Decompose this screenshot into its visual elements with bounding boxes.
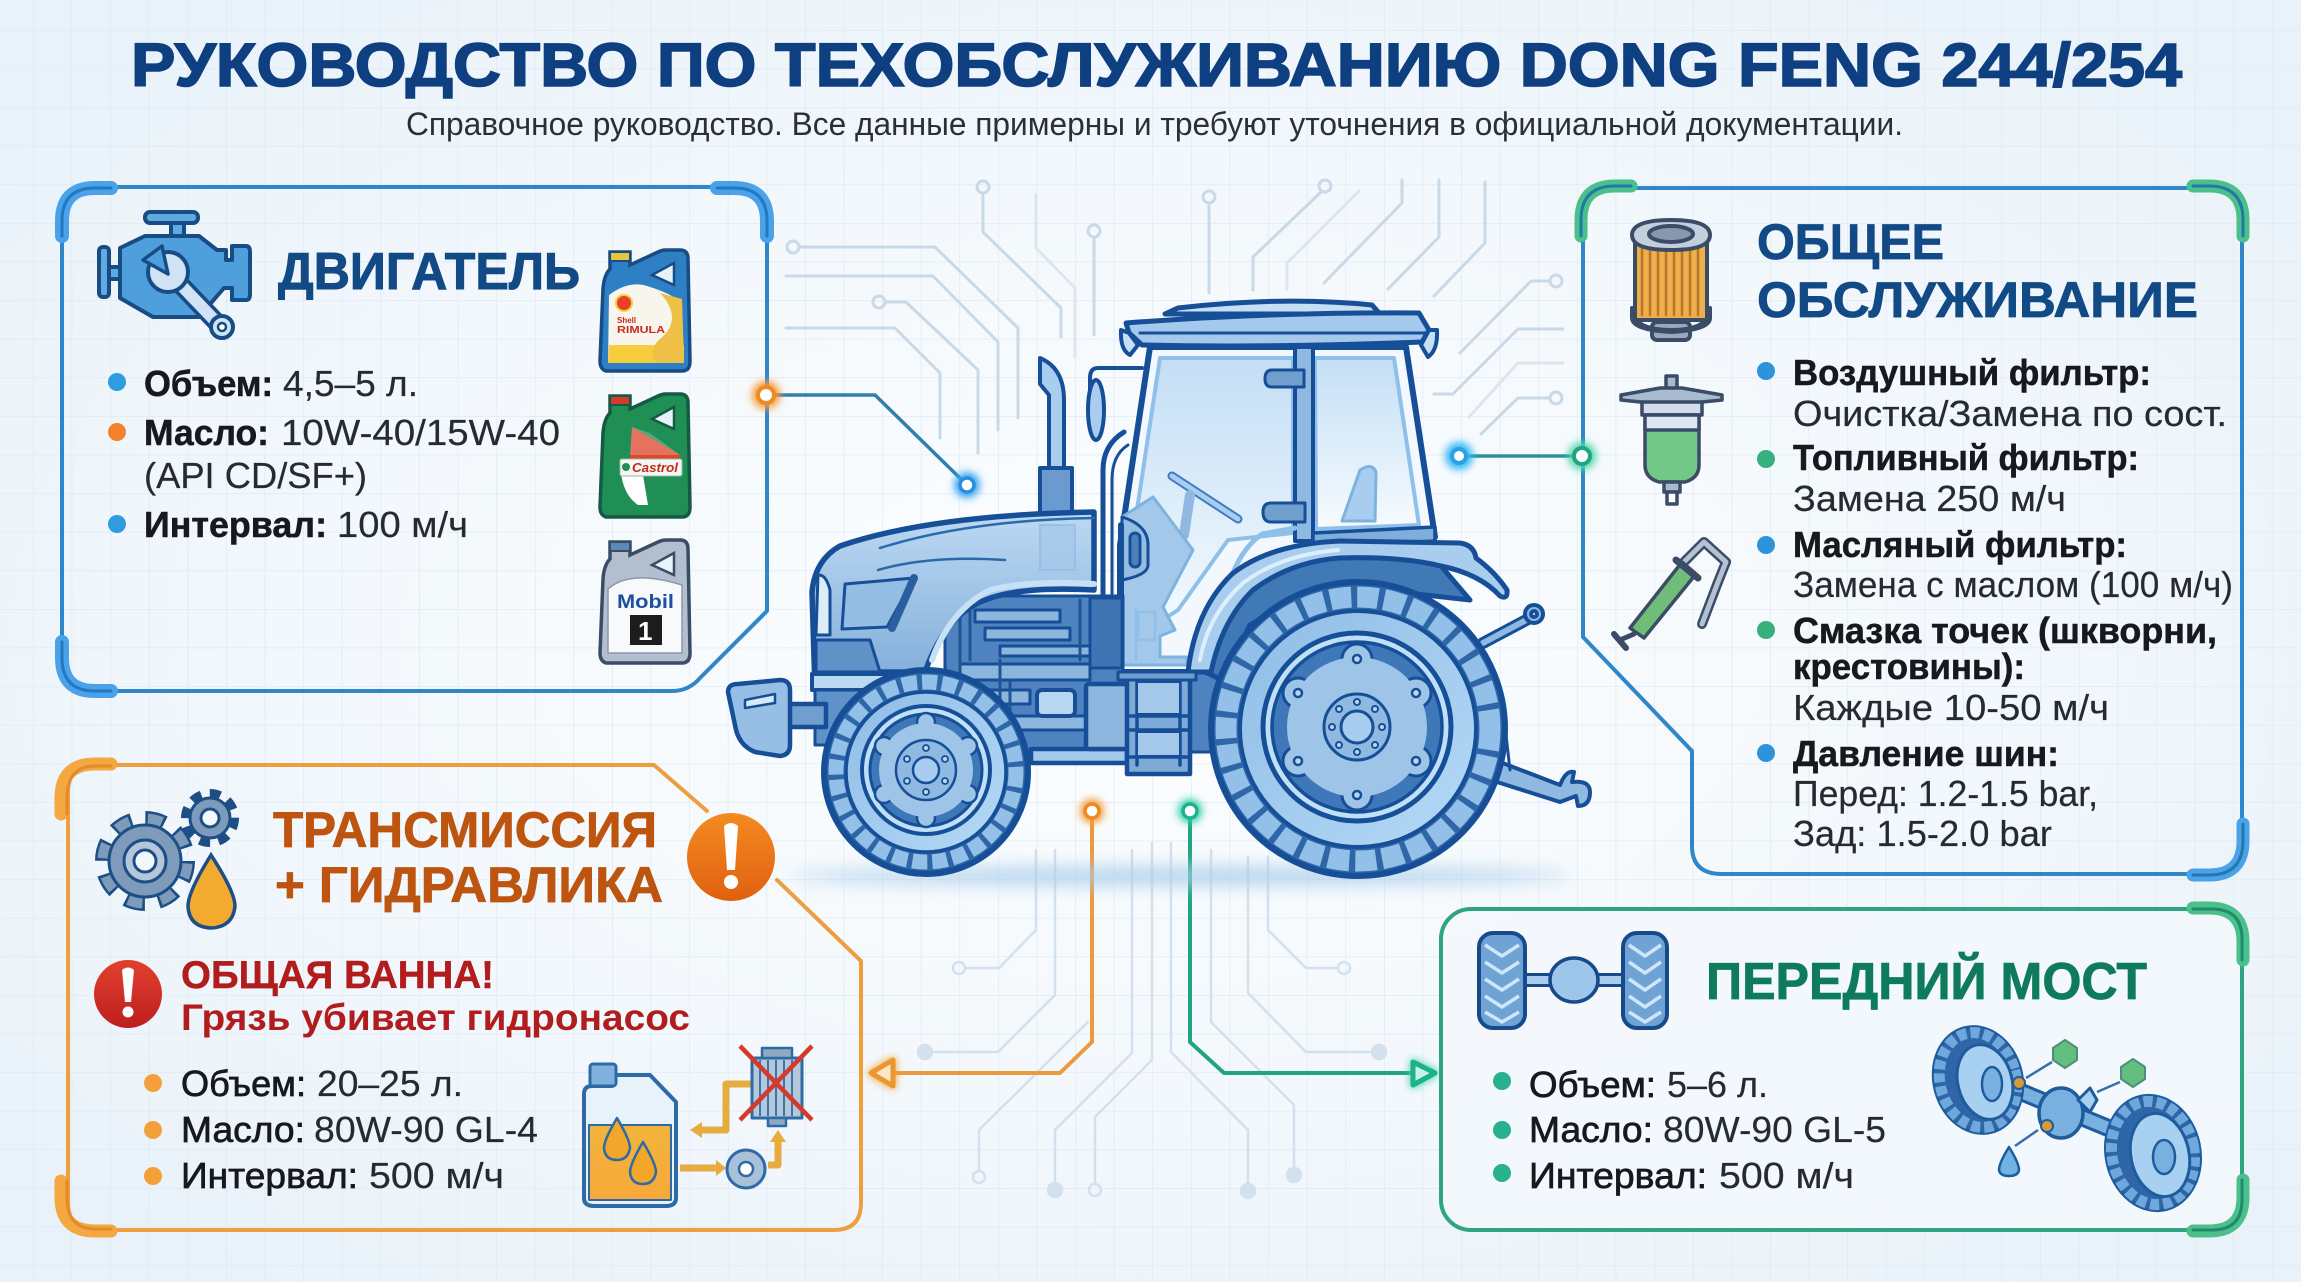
maintenance list: Топливный фильтр: (1793, 437, 2139, 478)
icon: Shell bottle (600, 250, 690, 371)
icon: Castrol bottle (600, 394, 690, 517)
spec list (1493, 1064, 1886, 1196)
icon: red warning (94, 960, 162, 1028)
heading: ОБЩЕЕ (1757, 214, 1944, 270)
icon: fuel filter (1621, 376, 1722, 504)
spec list: Объем: (144, 363, 273, 404)
icon: oil circuit diagram (584, 1046, 812, 1206)
panel: transmission and hydraulics (61, 764, 861, 1231)
panel frame (1441, 908, 2243, 1231)
spec list: (API CD/SF+) (144, 455, 367, 496)
spec list: 10W-40/15W-40 (281, 412, 560, 453)
maintenance list: Перед: 1.2-1.5 bar, (1793, 773, 2098, 814)
panel: engine (62, 187, 780, 691)
icon: Castrol bottle: Castrol (632, 460, 678, 475)
spec list: Интервал: (1529, 1155, 1707, 1196)
maintenance list: Воздушный фильтр: (1793, 352, 2151, 393)
tank, step, axle (1031, 672, 1228, 774)
connector node (752, 381, 780, 409)
roof and cab (1103, 301, 1437, 672)
maintenance list: Зад: 1.5-2.0 bar (1793, 813, 2052, 854)
icon: engine with wrench (99, 212, 250, 338)
spec list: 20–25 л. (317, 1063, 463, 1104)
maintenance list: Замена с маслом (100 м/ч) (1793, 564, 2233, 605)
maintenance list: Очистка/Замена по сост. (1793, 393, 2227, 434)
spec list: Интервал: (181, 1155, 358, 1196)
front wheel (824, 670, 1028, 874)
spec list: Масло: (181, 1109, 305, 1150)
maintenance list: крестовины): (1793, 646, 2025, 687)
icon: Mobil bottle: 1 (638, 616, 652, 646)
spec list: Интервал: (144, 504, 327, 545)
rear hitch (1483, 605, 1590, 806)
panel: general maintenance (1568, 186, 2243, 875)
maintenance list (1757, 352, 2233, 854)
grab rail (1103, 432, 1124, 610)
cab handles (1265, 370, 1304, 387)
icon: air filter (1632, 220, 1710, 340)
mirror (1088, 368, 1142, 440)
warning text: ОБЩАЯ ВАННА! (181, 954, 494, 997)
spec list: Объем: (1529, 1064, 1656, 1105)
icon: Shell bottle: RIMULA (617, 325, 665, 336)
exhaust pipe (1040, 358, 1072, 514)
heading: ТРАНСМИССИЯ (273, 802, 657, 858)
spec list: 5–6 л. (1667, 1064, 1768, 1105)
warning text: Грязь убивает гидронасос (181, 997, 690, 1038)
maintenance list: Каждые 10-50 м/ч (1793, 687, 2109, 728)
fender (1118, 541, 1507, 680)
maintenance list: Смазка точек (шкворни, (1793, 610, 2217, 651)
spec list: 80W-90 GL-5 (1663, 1109, 1886, 1150)
spec list: 500 м/ч (1719, 1155, 1854, 1196)
maintenance list: Замена 250 м/ч (1793, 478, 2066, 519)
icon: Mobil bottle (600, 540, 690, 663)
icon: Mobil bottle: Mobil (617, 592, 674, 613)
warning text (181, 954, 690, 1038)
icon: grease gun (1614, 542, 1726, 648)
connectors (766, 395, 1582, 1086)
spec list: Масло: (1529, 1109, 1653, 1150)
rear frame rail (1222, 528, 1295, 612)
connector node (1568, 442, 1596, 470)
panel frame (1581, 186, 2243, 875)
heading line two: + ГИДРАВЛИКА (275, 857, 663, 913)
subtitle: Справочное руководство. Все данные примерны и требуют уточнения в официальной документации. (406, 106, 1903, 142)
icon: gears and oil drop (104, 795, 235, 928)
spec list: 80W-90 GL-4 (314, 1109, 538, 1150)
panel frame (61, 764, 861, 1231)
maintenance list: Давление шин: (1793, 733, 2059, 774)
spec list: Объем: (181, 1063, 306, 1104)
icon: Shell bottle: Shell (617, 316, 636, 325)
spec list: 100 м/ч (337, 504, 468, 545)
panel frame (62, 187, 767, 691)
spec list (144, 1063, 538, 1196)
maintenance list: Масляный фильтр: (1793, 524, 2127, 565)
heading line two: ОБСЛУЖИВАНИЕ (1757, 272, 2198, 328)
engine compartment (945, 596, 1123, 752)
steering wheel (1172, 476, 1238, 519)
door and console (1121, 497, 1193, 665)
icon: warning badge (687, 813, 775, 901)
rear wheel (1211, 582, 1505, 876)
front weight (728, 680, 826, 756)
ground shadow (790, 868, 1570, 884)
title: РУКОВОДСТВО ПО ТЕХОБСЛУЖИВАНИЮ DONG FENG 244/254 (131, 31, 2182, 99)
spec list: 500 м/ч (369, 1155, 504, 1196)
spec list: 4,5–5 л. (283, 363, 418, 404)
icon: axle illustration (1922, 1016, 2211, 1220)
panel: front axle (1441, 908, 2243, 1231)
icon: axle with tires (1479, 933, 1667, 1028)
tractor (728, 301, 1590, 884)
spec list (108, 363, 560, 545)
circuit decoration (786, 180, 1563, 1198)
heading: ПЕРЕДНИЙ МОСТ (1706, 952, 2147, 1011)
hood (812, 512, 1094, 745)
seat in window (1342, 466, 1376, 521)
heading: ДВИГАТЕЛЬ (278, 243, 580, 301)
spec list: Масло: (144, 412, 269, 453)
